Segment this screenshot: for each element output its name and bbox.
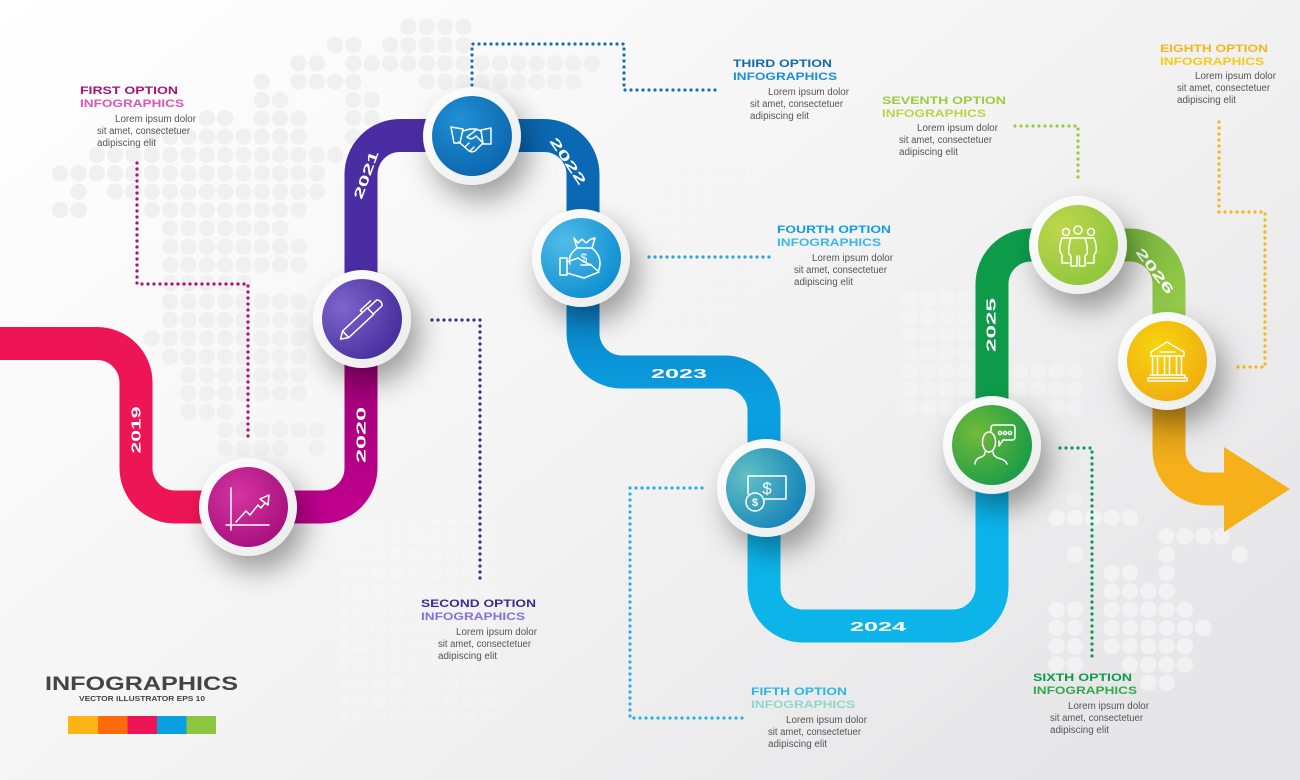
dotted connector 4 [649, 255, 770, 259]
road segment 2019 [0, 344, 248, 507]
heading: SIXTH OPTION [1033, 672, 1132, 684]
body text: sit amet, consectetuer [97, 126, 191, 137]
icon: rising chart [226, 488, 269, 530]
road segment 2020 [248, 319, 361, 507]
icon: bank building [1148, 342, 1187, 381]
colour swatches [68, 716, 216, 734]
dotted connector 6 [1060, 448, 1092, 657]
heading: FIRST OPTION [80, 85, 178, 97]
subheading: INFOGRAPHICS [777, 237, 881, 249]
dotted connector 2 [432, 320, 480, 580]
road segment 2022 [472, 136, 583, 258]
icon: pen [335, 296, 384, 342]
body text: Lorem ipsum dolor [917, 123, 999, 134]
body text [794, 253, 894, 288]
node 5: banknote [717, 439, 815, 537]
node 1: chart [199, 458, 297, 556]
road segment 2025 [992, 245, 1078, 445]
body text: adipiscing elit [750, 111, 809, 122]
panel: third option [733, 58, 850, 122]
node 8: bank [1118, 312, 1216, 410]
body text [438, 627, 538, 662]
end arrow [1169, 361, 1290, 532]
icon: three people [1060, 226, 1096, 266]
icon: banknote and coin: $ [752, 497, 758, 509]
node 6: person speaking [943, 396, 1041, 494]
panel: seventh option [882, 95, 1006, 158]
body text: sit amet, consectetuer [438, 639, 532, 650]
subheading: INFOGRAPHICS [421, 611, 525, 623]
body text: sit amet, consectetuer [794, 265, 888, 276]
body text [1050, 701, 1150, 736]
body text: adipiscing elit [899, 147, 958, 158]
panel: fourth option [777, 224, 894, 288]
body text: sit amet, consectetuer [899, 135, 993, 146]
body text: sit amet, consectetuer [1050, 713, 1144, 724]
node 7: team [1029, 196, 1127, 294]
body text [899, 123, 999, 158]
subheading: INFOGRAPHICS [751, 699, 855, 711]
body text: Lorem ipsum dolor [786, 715, 868, 726]
heading: FOURTH OPTION [777, 224, 891, 236]
heading: EIGHTH OPTION [1160, 43, 1268, 55]
body text: sit amet, consectetuer [1177, 83, 1271, 94]
panel: fifth option [751, 686, 868, 750]
year 2025: 2025 [984, 298, 998, 352]
body text: Lorem ipsum dolor [1195, 71, 1277, 82]
panel: second option [421, 598, 538, 662]
node 3: handshake [423, 87, 521, 185]
dotted connector 1 [137, 163, 248, 442]
subheading: INFOGRAPHICS [1033, 685, 1137, 697]
node 2: pen [313, 270, 411, 368]
icon: banknote and coin [746, 476, 786, 511]
body text: Lorem ipsum dolor [1068, 701, 1150, 712]
year 2020: 2020 [354, 407, 368, 463]
road segment 2026 [1078, 245, 1169, 361]
body text: Lorem ipsum dolor [768, 87, 850, 98]
dotted connector 7 [1015, 126, 1078, 183]
dotted connector 8 [1219, 122, 1265, 367]
subheading: INFOGRAPHICS [733, 71, 837, 83]
heading: FIFTH OPTION [751, 686, 847, 698]
heading: THIRD OPTION [733, 58, 832, 70]
panel: sixth option [1033, 672, 1150, 736]
node 4: money bag [532, 209, 630, 307]
body text: adipiscing elit [438, 651, 497, 662]
panel: first option [80, 85, 197, 149]
subheading: INFOGRAPHICS [80, 98, 184, 110]
panel: eighth option [1160, 43, 1277, 106]
body text: sit amet, consectetuer [768, 727, 862, 738]
subheading: INFOGRAPHICS [882, 108, 986, 120]
body text: adipiscing elit [1050, 725, 1109, 736]
subtitle: VECTOR ILLUSTRATOR EPS 10 [79, 696, 205, 703]
road segment 2021 [361, 136, 472, 319]
body text: Lorem ipsum dolor [456, 627, 538, 638]
road segment 2023 [583, 258, 764, 488]
year 2026: 2026 [1133, 245, 1177, 297]
title block [45, 674, 238, 734]
body text: adipiscing elit [97, 138, 156, 149]
year 2019: 2019 [128, 406, 144, 454]
body text: Lorem ipsum dolor [812, 253, 894, 264]
year 2023: 2023 [651, 366, 707, 381]
body text: adipiscing elit [794, 277, 853, 288]
heading: SEVENTH OPTION [882, 95, 1006, 107]
body text: sit amet, consectetuer [750, 99, 844, 110]
title: INFOGRAPHICS [45, 674, 238, 695]
dotted connector 5 [630, 488, 745, 718]
icon: money bag in hand: $ [581, 251, 588, 265]
year 2024: 2024 [850, 619, 907, 634]
heading: SECOND OPTION [421, 598, 536, 610]
road with year labels [0, 134, 1290, 634]
body text [1177, 71, 1277, 106]
body text [750, 87, 850, 122]
road segment 2024 [764, 445, 992, 626]
icon: person with speech bubble [975, 425, 1015, 464]
year 2021: 2021 [350, 149, 382, 201]
body text [768, 715, 868, 750]
icon: banknote and coin: $ [762, 479, 772, 498]
dotted connector 3 [472, 44, 720, 90]
year 2022: 2022 [547, 134, 589, 188]
body text [97, 114, 197, 149]
body text: Lorem ipsum dolor [115, 114, 197, 125]
body text: adipiscing elit [768, 739, 827, 750]
body text: adipiscing elit [1177, 95, 1236, 106]
subheading: INFOGRAPHICS [1160, 56, 1264, 68]
icon: handshake [451, 127, 491, 152]
